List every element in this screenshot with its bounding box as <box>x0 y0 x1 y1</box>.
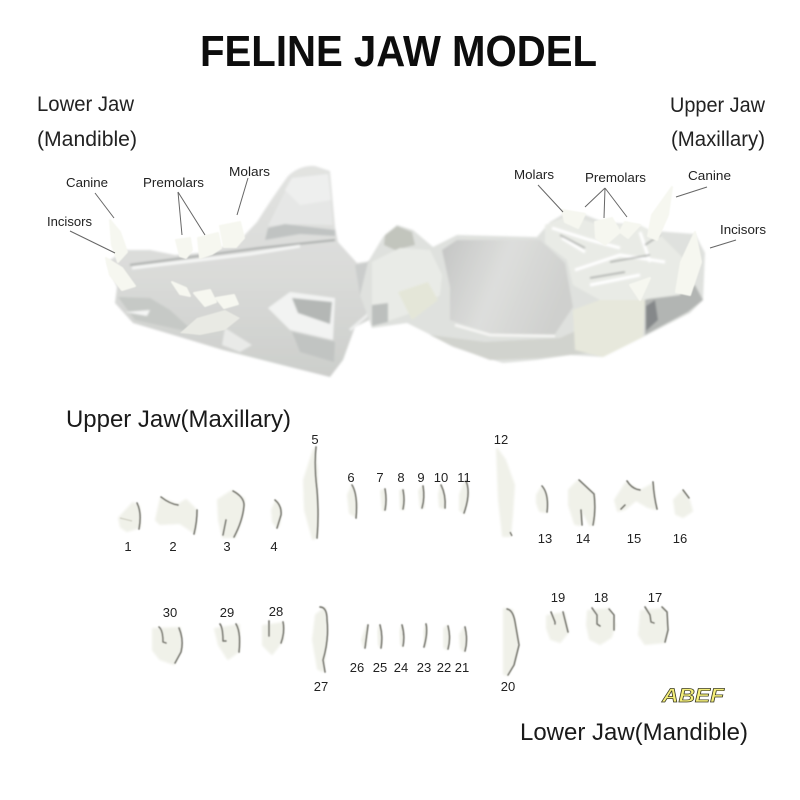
leader lines: mandible <box>70 178 248 253</box>
labels: maxilla tooth types: Canine <box>688 168 731 183</box>
jaw teeth: mandible <box>106 220 244 335</box>
heading: lower jaw (mandible): Lower Jaw <box>37 93 135 116</box>
tooth numbers: 20 <box>501 679 515 694</box>
tooth numbers <box>124 432 687 694</box>
labels: mandible tooth types: Premolars <box>143 175 205 190</box>
tooth numbers: 7 <box>376 470 384 485</box>
tooth numbers: 28 <box>269 604 283 619</box>
brand mark: ABEF <box>661 686 726 707</box>
labels: maxilla tooth types: Incisors <box>720 222 767 237</box>
tooth numbers: 26 <box>350 660 364 675</box>
heading: lower jaw (mandible) <box>37 93 137 151</box>
transparent jaw model: mandible <box>107 166 395 377</box>
tooth numbers: 27 <box>314 679 328 694</box>
upper jaw teeth, left group <box>119 447 468 539</box>
tooth numbers: 23 <box>417 660 431 675</box>
tooth numbers: 2 <box>169 539 177 554</box>
leader lines: maxilla <box>538 185 736 248</box>
labels: maxilla tooth types: Molars <box>514 167 555 182</box>
lower jaw teeth, left group <box>153 607 466 672</box>
heading: upper jaw (maxillary): (Maxillary) <box>671 128 765 151</box>
tooth numbers: 4 <box>270 539 278 554</box>
tooth numbers: 24 <box>394 660 408 675</box>
labels: mandible tooth types: Incisors <box>47 214 92 229</box>
labels: mandible tooth types: Molars <box>229 164 271 179</box>
tooth numbers: 15 <box>627 531 641 546</box>
tooth numbers: 13 <box>538 531 552 546</box>
tooth numbers: 12 <box>494 432 508 447</box>
heading: upper jaw teeth: Upper Jaw(Maxillary) <box>66 406 291 433</box>
tooth numbers: 25 <box>373 660 387 675</box>
tooth numbers: 11 <box>457 470 471 485</box>
labels: mandible tooth types <box>47 164 271 229</box>
heading: lower jaw teeth: Lower Jaw(Mandible) <box>520 719 748 746</box>
tooth numbers: 17 <box>648 590 662 605</box>
tooth numbers: 9 <box>417 470 425 485</box>
tooth numbers: 10 <box>434 470 448 485</box>
title: FELINE JAW MODEL <box>200 27 597 76</box>
tooth numbers: 18 <box>594 590 608 605</box>
labels: maxilla tooth types <box>514 167 767 237</box>
heading: lower jaw (mandible): (Mandible) <box>37 128 137 151</box>
tooth numbers: 19 <box>551 590 565 605</box>
tooth numbers: 8 <box>397 470 405 485</box>
jaw teeth: maxilla <box>562 187 701 300</box>
tooth numbers: 6 <box>347 470 355 485</box>
heading: upper jaw (maxillary): Upper Jaw <box>670 94 766 117</box>
tooth numbers: 3 <box>223 539 231 554</box>
labels: mandible tooth types: Canine <box>66 175 108 190</box>
tooth numbers: 22 <box>437 660 451 675</box>
tooth 8 <box>400 490 404 509</box>
tooth numbers: 29 <box>220 605 234 620</box>
labels: maxilla tooth types: Premolars <box>585 170 647 185</box>
tooth numbers: 16 <box>673 531 687 546</box>
heading: upper jaw (maxillary) <box>670 94 766 151</box>
tooth numbers: 5 <box>311 432 319 447</box>
upper jaw teeth, right group <box>497 449 692 536</box>
tooth numbers: 14 <box>576 531 590 546</box>
tooth numbers: 30 <box>163 605 177 620</box>
tooth numbers: 21 <box>455 660 469 675</box>
lower jaw teeth, right group <box>504 607 668 675</box>
transparent jaw model: maxilla <box>360 212 705 363</box>
tooth numbers: 1 <box>124 539 132 554</box>
